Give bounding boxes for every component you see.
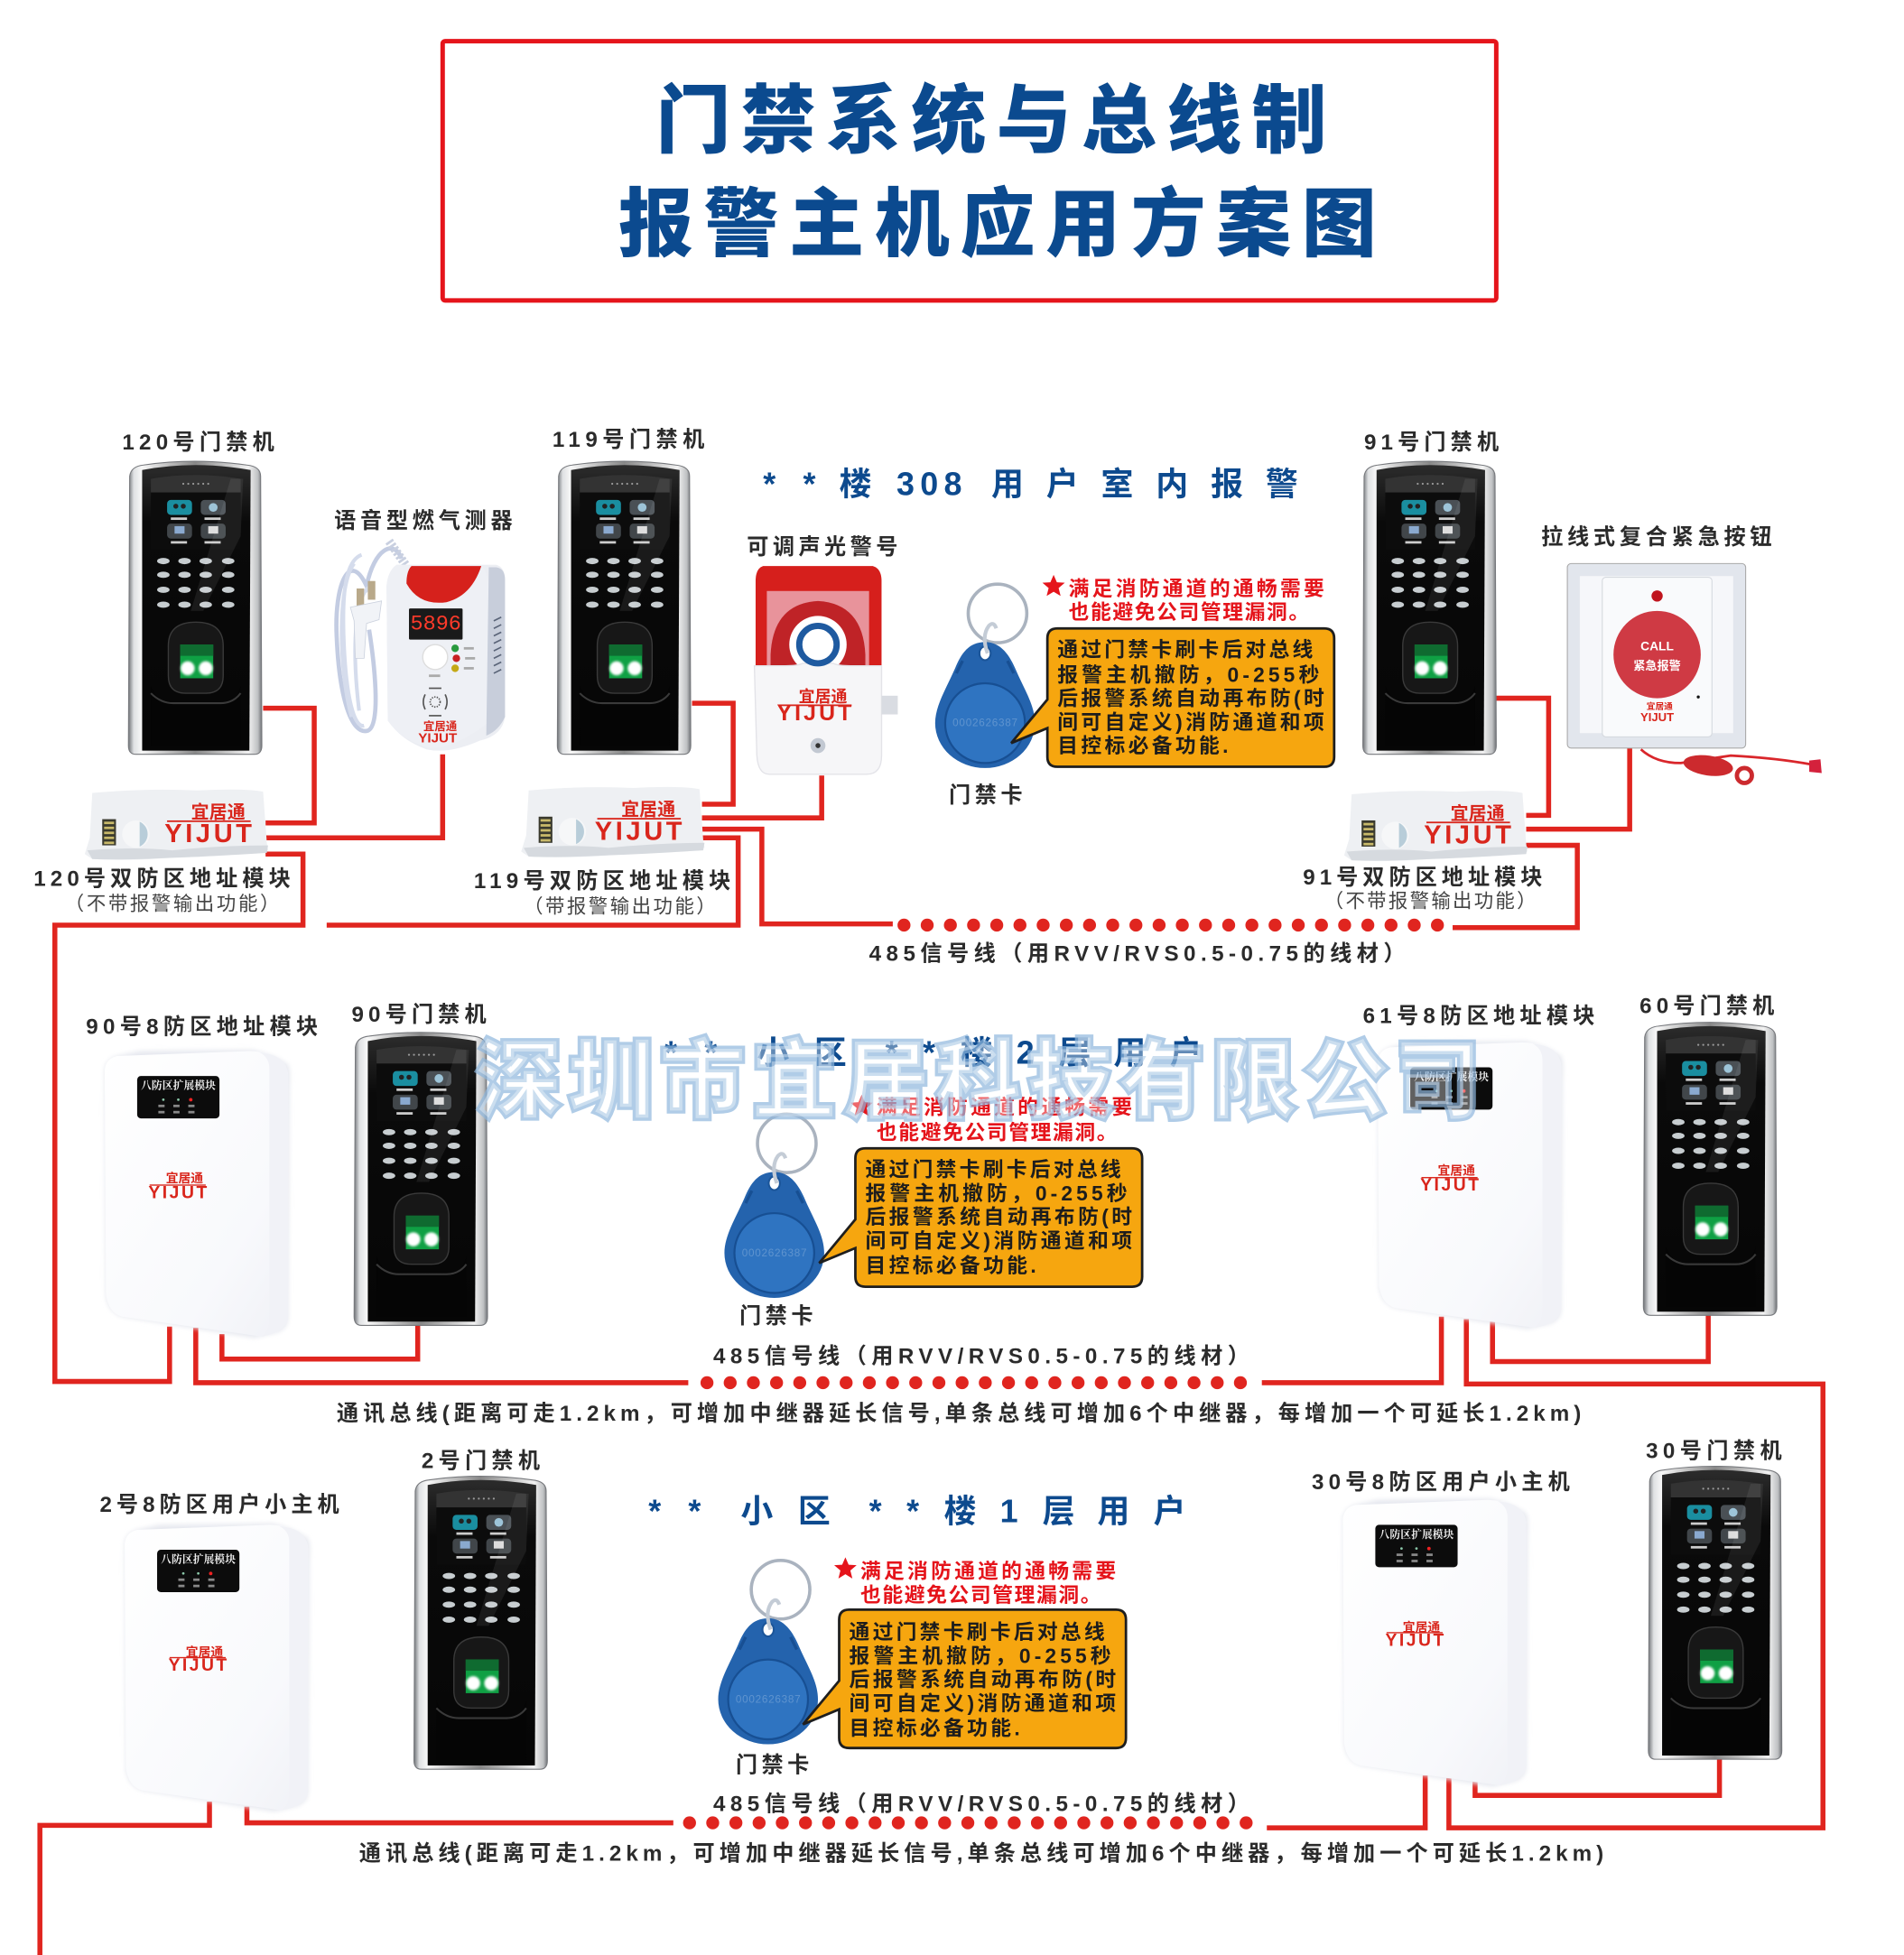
label: door 60: 60号门禁机 [1639,994,1774,1018]
access card group 3: 门禁卡 [736,1754,809,1778]
expansion module 90: 宜居通 [166,1168,203,1186]
wiring: middle row [196,1313,1823,1828]
door terminal 60 [1643,1023,1777,1315]
label: door 119: 119号门禁机 [553,428,704,452]
address module 119: YIJUT [595,817,683,846]
label: 485 line top: 485信号线（用RVV/RVS0.5-0.75的线材） [869,941,1406,966]
access card group 1: 门禁卡 [949,783,1023,808]
access card group 2: 门禁卡 [739,1304,813,1329]
dotted 485 line bottom [683,1816,1252,1830]
address module 91: 宜居通 [1451,799,1505,825]
access card group 2: 后报警系统自动再布防(时 [866,1205,1132,1228]
host module 2: 宜居通 [186,1642,223,1660]
expansion module 90: 八防区扩展模块 [141,1079,216,1092]
access card group 2: 报警主机撤防，0-255秒 [866,1181,1128,1205]
access card group 3: 通过门禁卡刷卡后对总线 [850,1620,1105,1644]
access card group 2 [724,1095,1142,1329]
gas detector: YIJUT [418,730,458,746]
siren: YIJUT [776,700,851,726]
door terminal 30 [1649,1466,1782,1759]
expansion module 90 [105,1050,290,1338]
panic button: CALL [1640,639,1674,653]
expansion module 61 [1378,1041,1563,1330]
door terminal 2 [414,1477,547,1769]
access card group 1 [935,575,1334,808]
access card group 2: 满足消防通道的通畅需要 [877,1096,1132,1119]
access card group 2: 目控标必备功能. [866,1254,1036,1277]
access card group 1: 通过门禁卡刷卡后对总线 [1057,638,1314,662]
label: host 30: 30号8防区用户小主机 [1312,1470,1570,1495]
watermark: 深圳市宜居科技有限公司 [477,1033,1480,1128]
expansion module 61: YIJUT [1420,1176,1479,1195]
address module 120: 宜居通 [191,797,246,823]
expansion module 61: 八防区扩展模块 [1414,1070,1489,1083]
panic button: 宜居通 [1647,700,1673,712]
label: 485 line bottom: 485信号线（用RVV/RVS0.5-0.75的线材） [713,1792,1249,1816]
access card group 3: 间可自定义)消防通道和项 [850,1691,1116,1715]
label: door 30: 30号门禁机 [1646,1439,1782,1463]
heading: unit 308: **楼308用户室内报警 [763,465,1298,502]
access card group 1: 后报警系统自动再布防(时 [1057,687,1324,710]
gas detector: 5896 [411,613,461,637]
title line 1: 门禁系统与总线制 [655,79,1327,162]
label: module 120: 120号双防区地址模块 [33,866,291,891]
title box [442,42,1496,301]
dotted 485 line middle [701,1376,1247,1389]
expansion module 61: 宜居通 [1437,1161,1475,1179]
access card group 1: 目控标必备功能. [1057,734,1228,757]
label: panic button: 拉线式复合紧急按钮 [1541,524,1772,550]
access card group 1: 满足消防通道的通畅需要 [1069,577,1324,600]
host module 2: 八防区扩展模块 [161,1553,236,1566]
access card group 2: 通过门禁卡刷卡后对总线 [866,1158,1121,1181]
host module 30: 宜居通 [1403,1617,1440,1635]
siren: 宜居通 [799,684,848,708]
label: door 91: 91号门禁机 [1364,431,1499,455]
door terminal 119 [557,461,691,755]
address module 120 [85,790,268,860]
wiring: top row [55,699,1630,1382]
label: bus line bottom: 通讯总线(距离可走1.2km，可增加中继器延长信号,单条总线可增加6个中继器，每增加一个可延长1.2km) [359,1842,1603,1867]
host module 2 [125,1524,310,1811]
label: module 91: 91号双防区地址模块 [1303,866,1542,890]
access card group 3: 满足消防通道的通畅需要 [860,1560,1116,1583]
note: module 119: （带报警输出功能） [524,895,716,917]
access card group 2: 间可自定义)消防通道和项 [866,1228,1132,1252]
label: door 90: 90号门禁机 [351,1003,487,1027]
access card group 2: 也能避免公司管理漏洞。 [877,1120,1118,1144]
access card group 1: 间可自定义)消防通道和项 [1057,710,1324,734]
label: 485 line middle: 485信号线（用RVV/RVS0.5-0.75的线材） [713,1344,1249,1368]
access card group 1: 也能避免公司管理漏洞。 [1069,600,1309,624]
host module 30: YIJUT [1385,1631,1444,1650]
title box: 报警主机应用方案图 [618,182,1377,266]
access card group 3 [719,1557,1126,1778]
access card group 3: 后报警系统自动再布防(时 [850,1668,1116,1691]
label: door 120: 120号门禁机 [122,431,274,455]
heading: floor 1: **小区**楼1层用户 [648,1493,1185,1530]
address module 119 [521,787,704,857]
heading: floor 2: **小区**楼2层用户 [664,1033,1202,1070]
gas detector: 宜居通 [423,718,458,734]
note: module 91: （不带报警输出功能） [1324,891,1537,913]
door terminal 90 [354,1033,488,1325]
gas detector [337,542,505,751]
access card group 3: 目控标必备功能. [850,1717,1020,1740]
panic button: YIJUT [1640,710,1674,724]
dotted 485 line top [897,919,1444,931]
address module 120: YIJUT [164,820,252,848]
label: host 2: 2号8防区用户小主机 [99,1493,339,1517]
panic button [1567,563,1822,783]
host module 2: YIJUT [168,1656,228,1675]
access card group 1: 报警主机撤防，0-255秒 [1057,662,1319,686]
wiring: bottom row [40,1756,1720,1955]
access card group 3: 也能避免公司管理漏洞。 [860,1583,1101,1607]
door terminal 120 [128,461,262,755]
address module 119: 宜居通 [621,795,675,821]
host module 30: 八防区扩展模块 [1379,1528,1454,1541]
expansion module 90: YIJUT [148,1183,207,1202]
label: module 119: 119号双防区地址模块 [474,869,730,894]
access card group 3: 报警主机撤防，0-255秒 [850,1644,1111,1667]
address module 91: YIJUT [1424,821,1511,850]
panic button: 紧急报警 [1633,658,1681,672]
address module 91 [1344,791,1528,861]
siren [755,566,897,774]
label: module 90: 90号8防区地址模块 [86,1015,318,1040]
label: bus line middle: 通讯总线(距离可走1.2km，可增加中继器延长信号,单条总线可增加6个中继器，每增加一个可延长1.2km) [337,1402,1581,1426]
host module 30 [1342,1498,1528,1787]
door terminal 91 [1363,461,1496,755]
label: door 2: 2号门禁机 [422,1449,540,1473]
label: siren: 可调声光警号 [747,535,897,560]
label: gas detector: 语音型燃气测器 [334,509,513,533]
note: module 120: （不带报警输出功能） [65,893,279,914]
label: module 61: 61号8防区地址模块 [1363,1004,1594,1028]
